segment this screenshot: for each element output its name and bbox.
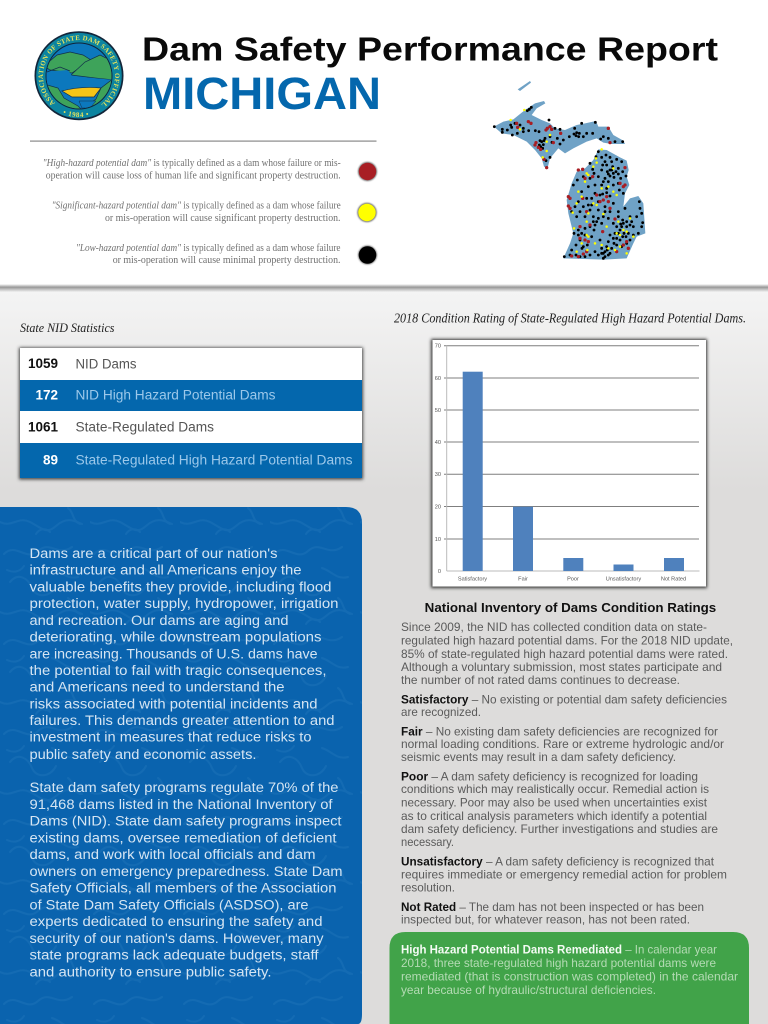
high hazard definition: "High-hazard potential dam" is typically defined as a dam whose failure or mis- — [43, 158, 341, 169]
text: Not Rated definition — [401, 900, 704, 926]
row: state-regulated high hazard: 89 — [43, 452, 58, 468]
text: Poor definition: as to critical analysis parameters which identify a potential — [401, 809, 707, 823]
paragraph: why dams matter: investment in measures that reduce risks to — [30, 730, 312, 745]
y axis labels: 50 — [435, 408, 441, 414]
callout text: High Hazard Potential Dams Remediated – In calendar year — [401, 942, 717, 956]
x axis labels: Fair — [518, 576, 528, 582]
map land — [494, 81, 645, 260]
text: Satisfactory definition: are recognized. — [401, 705, 481, 719]
header rule — [30, 140, 376, 142]
high hazard definition — [43, 158, 341, 182]
bar: Satisfactory 62 — [463, 372, 483, 571]
bar: Fair 20 — [513, 507, 533, 571]
map of Michigan dams — [492, 81, 646, 260]
paragraph: state dam safety programs: of State Dam Safety Officials (ASDSO), are — [30, 897, 308, 912]
heading: condition ratings: National Inventory of Dams Condition Ratings — [425, 601, 716, 615]
row: NID dams — [20, 348, 362, 379]
paragraph: why dams matter: and recreation. Our dams are aging and — [30, 613, 288, 628]
paragraph: state dam safety programs — [30, 780, 342, 979]
x axis labels: Not Rated — [661, 576, 686, 582]
paragraph: state dam safety programs: State dam safety programs regulate 70% of the — [30, 780, 338, 795]
y axis labels: 60 — [435, 376, 441, 382]
stats heading: State NID Statistics — [20, 320, 114, 335]
panel: high hazard potential dams remediated — [390, 932, 749, 1024]
callout text: 2018, three state-regulated high hazard potential dams were — [401, 956, 716, 970]
text: NID intro: Although a voluntary submission, most states participate and — [401, 660, 722, 674]
state name: MICHIGAN — [143, 68, 381, 119]
text: Fair definition: Fair – No existing dam safety deficiencies are recognized for — [401, 724, 718, 738]
panel: state NID statistics table — [19, 348, 363, 480]
significant hazard definition: "Significant-hazard potential dam" is typically defined as a dam whose failure — [52, 201, 341, 212]
text: Not Rated definition: inspected but, for whatever reason, has not been rated. — [401, 912, 690, 926]
y axis labels: 0 — [438, 569, 441, 575]
text: Satisfactory definition: Satisfactory – No existing or potential dam safety deficiencies — [401, 692, 727, 706]
row: state-regulated dams: State-Regulated Dams — [76, 420, 214, 434]
low hazard definition — [76, 243, 341, 266]
paragraph: state dam safety programs: Dams (NID). State dam safety programs inspect — [30, 814, 342, 828]
x axis labels: Unsatisfactory — [606, 576, 641, 582]
row: NID high hazard: 172 — [35, 388, 58, 402]
text: NID intro: the number of not rated dams continues to decrease. — [401, 673, 680, 687]
text: Poor definition — [401, 770, 718, 849]
panel: blue introduction — [0, 507, 362, 1024]
paragraph: state dam safety programs: existing dams, oversee remediation of deficient — [30, 830, 337, 845]
paragraph: why dams matter: public safety and economic assets. — [30, 747, 256, 762]
x axis labels: Poor — [567, 576, 579, 582]
icon: black dot — [358, 245, 377, 265]
y axis labels: 40 — [435, 440, 441, 446]
paragraph: state dam safety programs: Safety Officials, all members of the Association — [30, 880, 336, 896]
callout text — [401, 942, 738, 997]
paragraph: state dam safety programs: state programs lack adequate budgets, staff — [30, 948, 319, 962]
text: Fair definition: seismic events may result in a dam safety deficiency. — [401, 750, 676, 764]
row: NID dams: 1059 — [28, 356, 58, 371]
text: NID intro — [401, 620, 733, 687]
paragraph: state dam safety programs: owners on emergency preparedness. State Dam — [30, 864, 342, 879]
lower page background — [0, 284, 768, 1024]
row: NID dams: NID Dams — [76, 356, 137, 372]
icon: red dot — [358, 162, 377, 181]
paragraph: why dams matter: and Americans need to understand the — [30, 680, 284, 695]
paragraph: state dam safety programs: experts dedicated to ensuring the safety and — [30, 914, 322, 929]
paragraph: why dams matter: infrastructure and all Americans enjoy the — [30, 562, 302, 578]
paragraph: state dam safety programs: dams, and work with local officials and dam — [30, 847, 316, 862]
paragraph: why dams matter: failures. This demands greater attention to and — [30, 713, 334, 728]
row: NID high hazard — [20, 380, 362, 411]
text: Poor definition: Poor – A dam safety deficiency is recognized for loading — [401, 770, 698, 784]
text: Unsatisfactory definition — [401, 855, 727, 895]
paragraph: why dams matter: deteriorating, while downstream populations — [30, 630, 322, 644]
bar chart: condition ratings — [431, 339, 707, 588]
callout text: remediated (that is construction was completed) in the calendar — [401, 970, 738, 984]
text: Unsatisfactory definition: resolution. — [401, 881, 455, 895]
text: Not Rated definition: Not Rated – The dam has not been inspected or has been — [401, 900, 704, 914]
text: NID intro: Since 2009, the NID has collected condition data on state- — [401, 620, 707, 634]
high hazard definition: operation will cause loss of human life and significant property destruction. — [46, 170, 341, 182]
text: Poor definition: dam safety deficiency. Further investigations and studies are — [401, 822, 718, 836]
y axis labels: 70 — [435, 344, 441, 350]
map dots: high hazard — [517, 122, 628, 257]
logo founding year: • 1984 • — [64, 111, 88, 118]
row: state-regulated high hazard — [20, 443, 362, 478]
map dots: significant hazard — [511, 110, 633, 253]
y axis labels: 10 — [435, 537, 441, 543]
paragraph: why dams matter — [30, 546, 338, 762]
text: Fair definition — [401, 724, 724, 764]
paragraph: why dams matter: risks associated with potential incidents and — [30, 696, 318, 712]
text: Poor definition: necessary. — [401, 835, 454, 849]
paragraph: why dams matter: Dams are a critical part of our nation's — [30, 546, 278, 561]
paragraph: state dam safety programs: 91,468 dams listed in the National Inventory of — [30, 797, 333, 812]
paragraph: why dams matter: are increasing. Thousands of U.S. dams have — [30, 646, 318, 661]
text: Satisfactory definition — [401, 692, 727, 719]
paragraph: why dams matter: valuable benefits they provide, including flood — [30, 579, 332, 594]
x axis labels — [458, 576, 686, 582]
callout text: year because of hydraulic/structural deficiencies. — [401, 983, 656, 997]
paragraph: state dam safety programs: security of our nation's dams. However, many — [30, 931, 324, 946]
y axis labels — [435, 344, 441, 575]
bar: Unsatisfactory 2 — [614, 564, 634, 571]
hazard definitions legend — [43, 158, 377, 266]
text: NID intro: regulated high hazard potential dams. For the 2018 NID update, — [401, 634, 733, 648]
text: Unsatisfactory definition: requires immediate or emergency remedial action for problem — [401, 867, 727, 881]
low hazard definition: or mis-operation will cause minimal property destruction. — [113, 255, 340, 266]
bar: Poor 4 — [563, 558, 583, 571]
bar: Not Rated 4 — [664, 558, 684, 571]
text: Fair definition: normal loading conditions. Rare or extreme hydrologic and/or — [401, 737, 724, 751]
row: NID high hazard: NID High Hazard Potential Dams — [76, 388, 276, 402]
significant hazard definition: or mis-operation will cause significant property destruction. — [105, 213, 340, 224]
significant hazard definition — [52, 201, 341, 224]
row: state-regulated dams: 1061 — [28, 420, 58, 434]
x axis labels: Satisfactory — [458, 576, 487, 582]
low hazard definition: "Low-hazard potential dam" is typically defined as a dam whose failure — [76, 243, 341, 254]
header background — [0, 0, 768, 285]
paragraph: why dams matter: the potential to fail with tragic consequences, — [30, 663, 326, 678]
text: Poor definition: conditions which may realistically occur. Remedial action is — [401, 782, 709, 796]
paragraph: state dam safety programs: and authority to ensure public safety. — [30, 964, 272, 979]
row: state-regulated dams — [20, 411, 362, 443]
map dots: low hazard — [494, 107, 643, 258]
logo: Association of State Dam Safety Officials seal — [34, 31, 124, 120]
text: Unsatisfactory definition: Unsatisfactory – A dam safety deficiency is recognized that — [401, 855, 715, 869]
text: Poor definition: necessary. Poor may also be used when uncertainties exist — [401, 796, 708, 810]
text: NID intro: 85% of state-regulated high hazard potential dams were rated. — [401, 647, 728, 661]
y axis labels: 20 — [435, 504, 441, 510]
title: Dam Safety Performance Report — [142, 30, 718, 68]
paragraph: why dams matter: protection, water supply, hydropower, irrigation — [30, 596, 338, 611]
y axis labels: 30 — [435, 472, 441, 478]
icon: yellow dot — [357, 203, 377, 222]
row: state-regulated high hazard: State-Regulated High Hazard Potential Dams — [76, 452, 353, 468]
